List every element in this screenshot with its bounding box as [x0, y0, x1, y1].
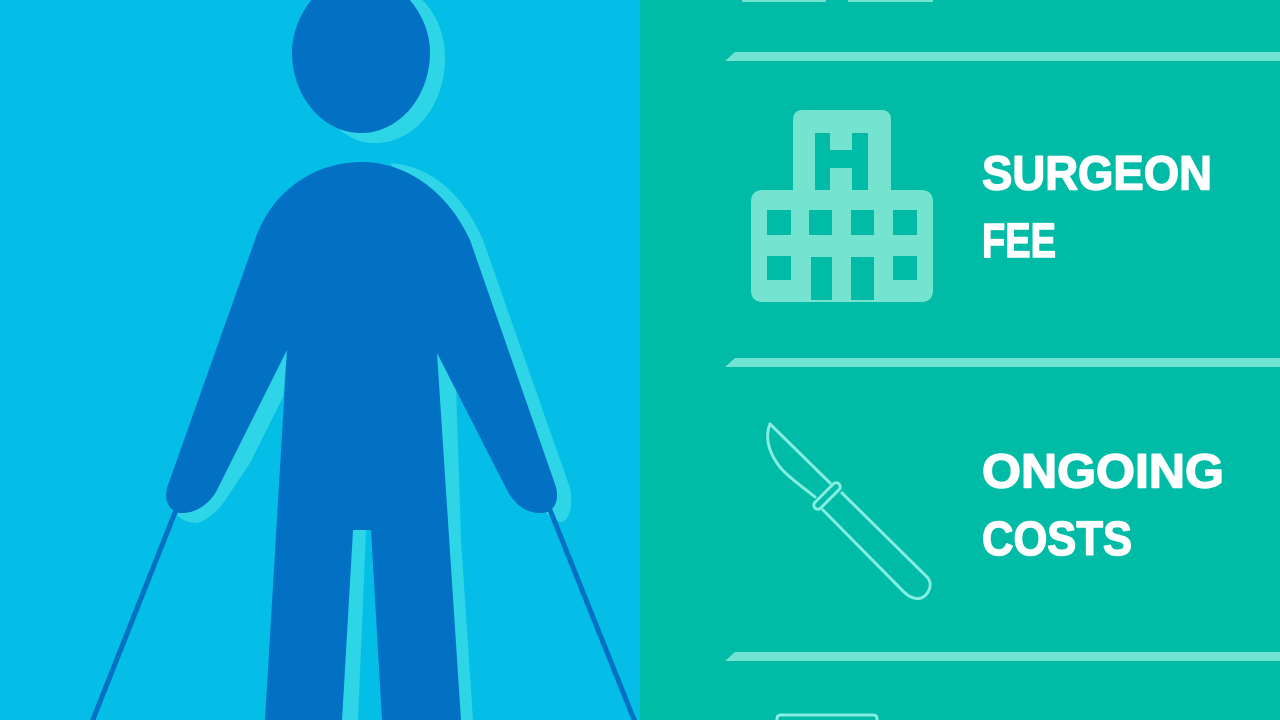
icon: scalpel — [768, 424, 930, 599]
right leg strip — [437, 353, 473, 720]
divider rules — [725, 52, 1280, 661]
inner leg strip — [342, 530, 366, 720]
icon: person on crutches — [92, 0, 635, 720]
icon: cropped top item — [742, 0, 933, 2]
right crutch — [550, 510, 635, 720]
panel: blue figure background — [0, 0, 640, 720]
icon: hospital — [751, 110, 933, 302]
body — [166, 162, 557, 720]
fee word: FEE — [982, 215, 1056, 268]
icon: cropped bottom item — [777, 715, 877, 720]
costs word: COSTS — [982, 513, 1132, 566]
left arm shadow — [177, 350, 287, 523]
panel: teal cost list background — [640, 0, 1280, 720]
surgeon word: SURGEON — [982, 148, 1212, 200]
label: surgeon fee — [982, 148, 1212, 268]
ongoing word: ONGOING — [982, 446, 1224, 498]
right shoulder and arm shadow — [390, 163, 571, 522]
head — [292, 0, 430, 133]
head shadow — [340, 0, 445, 143]
left crutch — [92, 510, 176, 720]
label: ongoing costs — [982, 446, 1224, 566]
